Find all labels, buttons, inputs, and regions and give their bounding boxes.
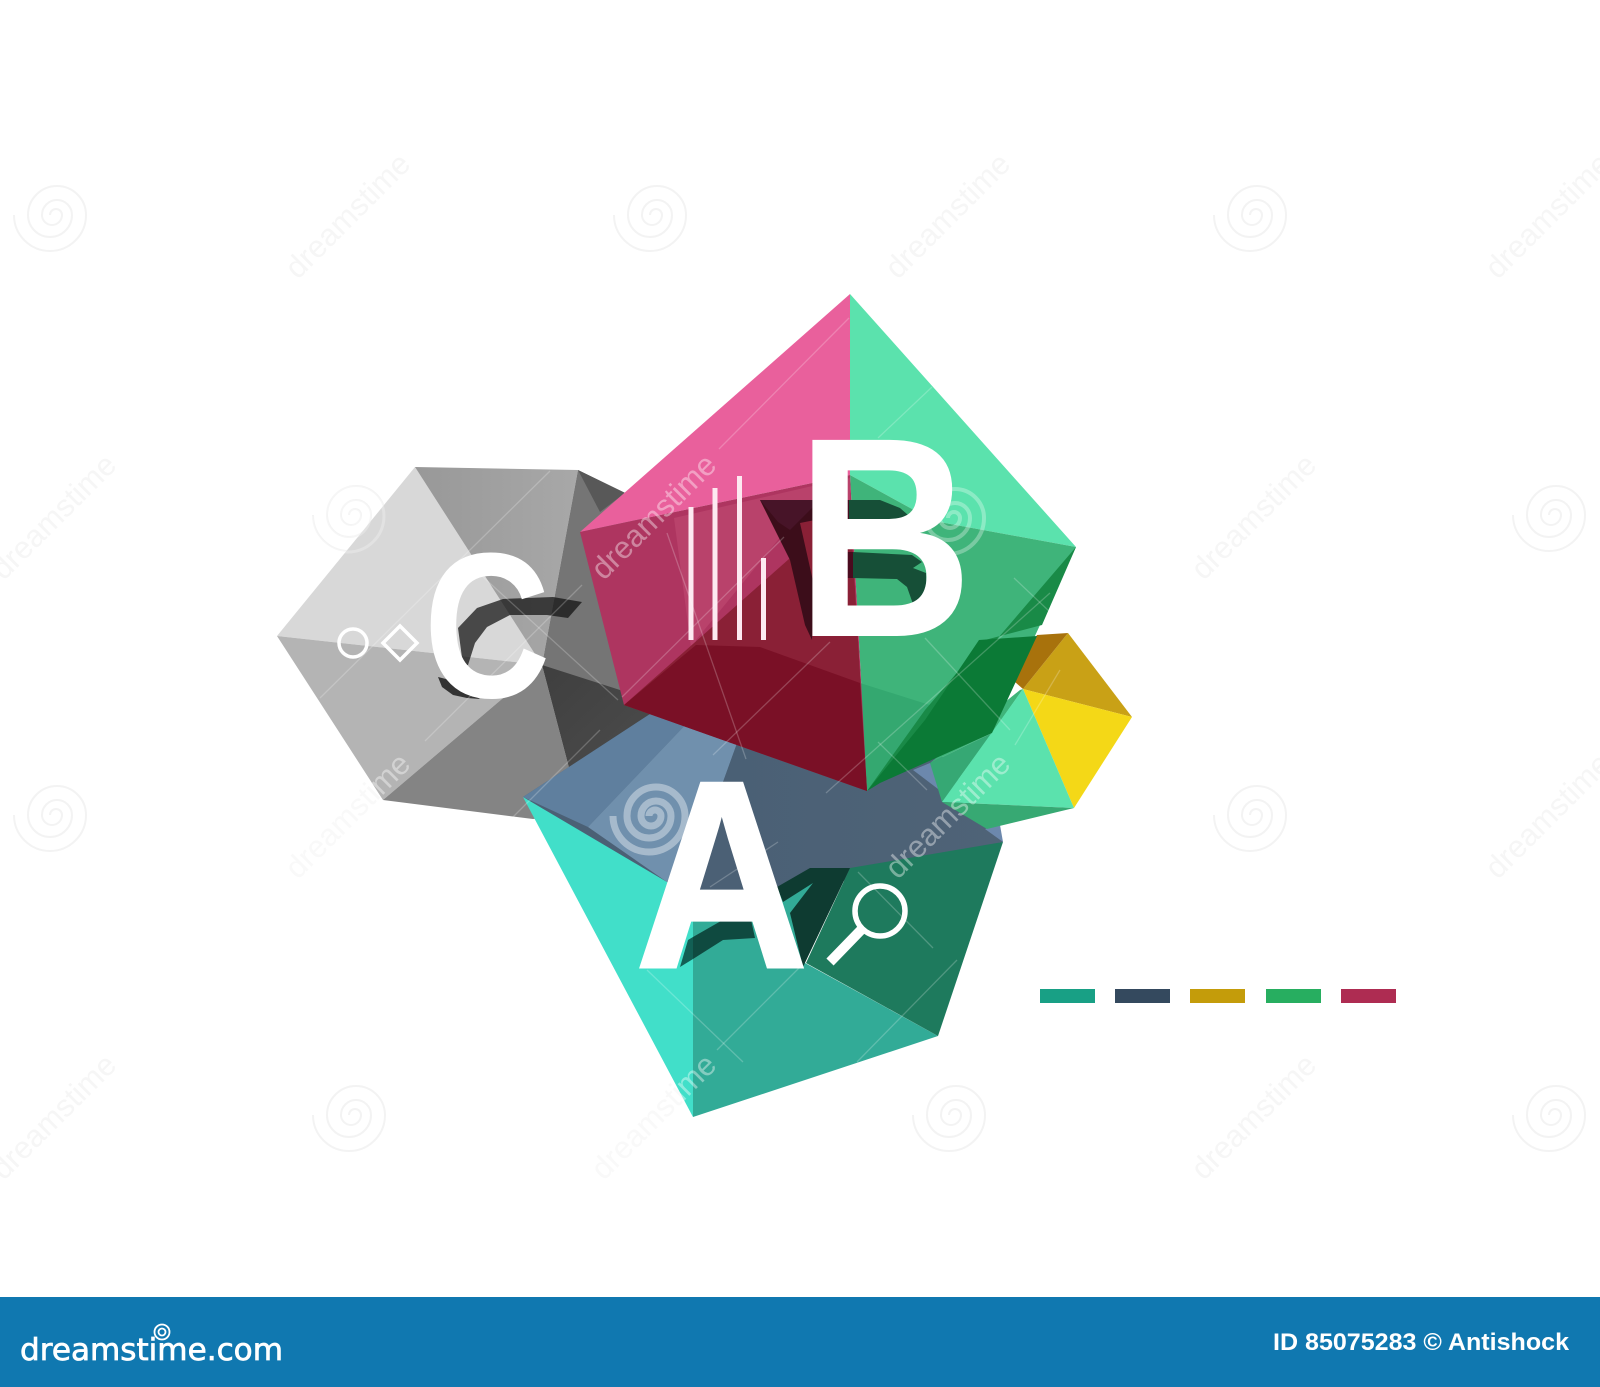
- letter A: A: [635, 725, 809, 1024]
- legend colour dashes: [1040, 989, 1396, 1003]
- watermark overlay lines: [320, 318, 1060, 1062]
- icon: magnifier: [830, 886, 905, 962]
- icon: bar chart: [688, 476, 766, 640]
- faint background watermark: dreamstime: [878, 146, 1017, 285]
- footer logo spiral: [154, 1324, 170, 1340]
- watermark overlay spirals: [312, 487, 984, 852]
- panel: B pink and green pentagon: [580, 294, 1076, 791]
- watermark overlay text: dreamstime: [584, 447, 723, 586]
- shadow of letter B: [760, 500, 927, 640]
- faint background watermark: [0, 146, 1600, 1186]
- watermark overlay text: [278, 447, 1017, 1186]
- faint background watermark: dreamstime: [278, 746, 417, 885]
- watermark overlay text: dreamstime: [584, 1047, 723, 1186]
- faint background watermark: dreamstime: [584, 1047, 723, 1186]
- faint background watermark: dreamstime: [1184, 447, 1323, 586]
- letter C: C: [424, 510, 551, 741]
- icon: diamond: [383, 626, 417, 660]
- footer image id and credit: ID 85075283 © Antishock: [1273, 1329, 1570, 1356]
- watermark overlay text: dreamstime: [878, 746, 1017, 885]
- watermark overlay text: dreamstime: [278, 746, 417, 885]
- panel: C grey hexagon: [277, 467, 690, 819]
- shadow of letter C: [438, 597, 582, 699]
- footer banner: [0, 1297, 1600, 1387]
- panel: yellow and green hexagon: [930, 633, 1132, 829]
- faint background watermark: dreamstime: [278, 146, 417, 285]
- shadow of letter A: [680, 868, 850, 967]
- letter B: B: [796, 379, 973, 697]
- icon: circle: [339, 629, 367, 657]
- footer logo text: dreamstime.com: [20, 1333, 283, 1368]
- faint background watermark: dreamstime: [1184, 1047, 1323, 1186]
- panel: A teal pentagon: [523, 700, 1003, 1117]
